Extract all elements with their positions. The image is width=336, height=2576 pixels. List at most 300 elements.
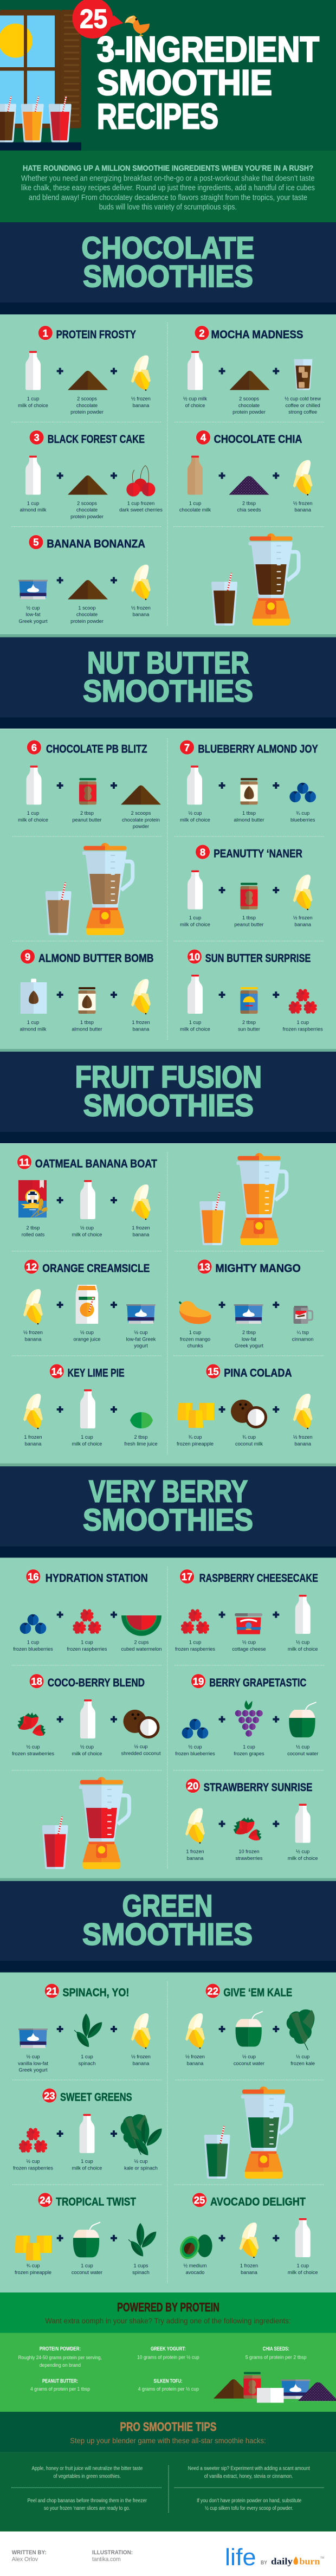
plus <box>219 2235 225 2242</box>
recipe 18: Coco-Berry Blend <box>12 1674 161 1756</box>
plus <box>111 1302 117 1308</box>
ingredient: watermelon: 2 cups <box>134 1640 149 1645</box>
ingredient: milk: milk of choice <box>288 2270 318 2275</box>
ingredient: banana: 1 frozen <box>24 1434 42 1440</box>
number badge 14 <box>49 1364 64 1379</box>
ingredient: milk: milk of choice <box>72 2165 102 2171</box>
ingredient: milk: ½ cup <box>296 1640 309 1645</box>
recipe 21: Spinach, Yo! <box>18 1983 151 2073</box>
ingredient: blueberries: frozen blueberries <box>175 1751 215 1756</box>
ingredient: cherries: 1 cup frozen <box>127 500 154 506</box>
ingredient: peanut butter <box>234 883 264 927</box>
ingredient: raspberries: 1 cup <box>81 1640 93 1645</box>
ingredient: almond butter <box>234 778 264 822</box>
ingredient: milk <box>72 1699 102 1756</box>
ingredient: milk <box>72 1180 102 1237</box>
ingredient: protein powder <box>68 580 108 624</box>
ingredient: protein powder: 2 scoops <box>77 396 97 401</box>
number badge 19 <box>191 1674 205 1689</box>
tip 1 <box>31 2465 143 2480</box>
ingredient: coconut milk: coconut milk <box>235 1441 263 1446</box>
illustration: fruit blender and glass <box>199 1153 287 1245</box>
ingredient: pineapple <box>15 2236 51 2275</box>
number badge 16: 16 <box>28 1571 39 1582</box>
protein item: greek yogurt <box>137 2346 199 2360</box>
ingredient: coconut water: coconut water <box>72 2270 102 2275</box>
ingredient: banana: ½ frozen <box>23 1330 43 1335</box>
plus <box>273 991 279 998</box>
number badge 24 <box>38 2193 53 2207</box>
plus <box>273 2235 279 2242</box>
recipe 9: Almond Butter Bomb <box>20 949 154 1032</box>
ingredient: banana: banana <box>25 1441 42 1446</box>
protein item: powder: depending on brand <box>40 2362 81 2368</box>
ingredient: blueberries: ¾ cup <box>296 810 309 816</box>
ingredient: yogurt: low-fat <box>242 1336 256 1342</box>
ingredient: raspberries: ½ cup <box>26 2159 40 2164</box>
ingredient: milk: ½ cup <box>296 1849 309 1854</box>
ingredient: coconut water: ½ cup <box>242 2054 256 2059</box>
ingredient: milk <box>180 871 210 927</box>
section strip and header: Nut Butter Smoothies: NUT BUTTER <box>87 646 249 680</box>
window sill <box>0 142 81 151</box>
ingredient: banana: ½ frozen <box>131 605 151 610</box>
logo: life by daily burn: burn <box>299 2556 320 2567</box>
ingredient: banana: banana <box>187 1856 204 1861</box>
ingredient: yogurt <box>18 580 48 624</box>
protein item: chia seeds <box>245 2346 306 2360</box>
ingredient: shredded coconut: shredded coconut <box>121 1750 161 1756</box>
ingredient: banana: 1 frozen <box>240 2263 258 2269</box>
ingredient: cold brew coffee: coffee or chilled <box>286 403 320 408</box>
ingredient: cherries <box>119 466 163 513</box>
ingredient: milk: milk of choice <box>180 817 210 822</box>
ingredient: kale or spinach <box>121 2114 165 2171</box>
ingredient: avocado <box>176 2233 212 2275</box>
ingredient: rolled oats: rolled oats <box>22 1232 45 1237</box>
ingredient: peanut butter: 2 tbsp <box>80 810 94 816</box>
logo: life by daily burn: daily <box>271 2556 293 2567</box>
ingredient: rolled oats: 2 tbsp <box>26 1225 40 1231</box>
ingredient: milk: milk of choice <box>180 922 210 927</box>
icon: toucan bird <box>125 15 150 36</box>
header panel <box>0 0 336 151</box>
section strip and header: Very Berry Smoothies <box>0 1464 336 1558</box>
heading: SUN BUTTER SURPRISE <box>205 952 311 965</box>
ingredient: protein powder <box>230 371 270 415</box>
recipe 15: Pina Colada <box>177 1364 313 1446</box>
ingredient: mango: frozen mango <box>180 1336 210 1342</box>
ingredient: protein powder: protein powder <box>70 619 104 624</box>
number badge 3: 3 <box>34 432 40 443</box>
ingredient: almond milk: 1 cup <box>27 1020 39 1025</box>
section strip and header: Green Smoothies: SMOOTHIES <box>82 1917 253 1952</box>
ingredient: banana: banana <box>133 403 150 408</box>
ingredient: protein powder: 2 scoops <box>239 396 259 401</box>
ingredient: pineapple: ¾ cup <box>188 1434 202 1440</box>
recipe 17: Raspberry Cheesecake <box>175 1569 318 1652</box>
plus <box>219 887 225 893</box>
ingredient: milk: milk of choice <box>18 817 48 822</box>
section strip and header: Green Smoothies <box>0 1878 336 1972</box>
plus <box>57 1197 63 1203</box>
heading: OATMEAL BANANA BOAT <box>35 1158 157 1170</box>
credit: writer: Alex Orlov <box>12 2556 38 2563</box>
ingredient: yogurt: ½ cup <box>26 2054 40 2059</box>
ingredient: cinnamon <box>292 1306 314 1342</box>
ingredient: banana: banana <box>133 1026 150 1032</box>
heading: POWERED BY PROTEIN <box>117 2300 219 2314</box>
ingredient: raspberries <box>283 989 323 1032</box>
ingredient: banana <box>131 1184 151 1237</box>
protein item: silken tofu: 4 grams of protein per ½ cup <box>138 2386 199 2392</box>
number badge 17 <box>180 1569 194 1584</box>
plus <box>273 1716 279 1723</box>
ingredient: milk: of choice <box>185 403 205 408</box>
ingredient: avocado: avocado <box>186 2270 204 2275</box>
ingredient: raspberries: frozen raspberries <box>67 1646 107 1652</box>
number badge 13 <box>197 1259 212 1274</box>
plus <box>219 1612 225 1618</box>
number badge 7: 7 <box>184 742 190 753</box>
ingredient: milk: 1 cup <box>81 1434 93 1440</box>
ingredient: cinnamon: ¼ tsp <box>296 1330 309 1335</box>
illustration: chocolate blender and glass <box>211 533 299 626</box>
plus <box>219 2026 225 2032</box>
ingredient: strawberries: frozen strawberries <box>12 1751 54 1756</box>
ingredient: almond butter: 1 tbsp <box>80 1020 94 1025</box>
panel: pro smoothie tips <box>0 2412 336 2531</box>
section strip and header: Green Smoothies: GREEN <box>122 1889 212 1923</box>
ingredient: protein powder: 2 scoops <box>77 500 97 506</box>
ingredient: protein powder: chocolate <box>76 507 98 513</box>
ingredient: lime <box>124 1412 158 1446</box>
ingredient: banana: banana <box>133 1232 150 1237</box>
heading: TROPICAL TWIST <box>56 2195 136 2208</box>
ingredient: milk <box>180 975 210 1032</box>
number badge 5: 5 <box>33 537 39 548</box>
ingredient: cherries: dark sweet cherries <box>119 507 163 513</box>
protein item: peanut butter: 4 grams of protein per 1 tbsp <box>30 2386 90 2392</box>
number badge 2 <box>195 326 209 340</box>
ingredient: watermelon: cubed watermelon <box>121 1646 162 1652</box>
illustration: berry blender and glass <box>42 1777 129 1869</box>
plus <box>111 782 117 789</box>
ingredient: protein powder: powder <box>133 824 149 829</box>
credit: writer: WRITTEN BY: <box>12 2549 47 2556</box>
recipe 11: Oatmeal Banana Boat <box>17 1155 157 1237</box>
plus <box>273 782 279 789</box>
ingredient: almond butter: 1 tbsp <box>242 810 256 816</box>
ingredient: chia seeds: chia seeds <box>237 507 261 513</box>
ingredient: coconut water <box>287 1702 318 1756</box>
heading: PINA COLADA <box>224 1367 292 1380</box>
ingredient: almond milk: almond milk <box>20 1026 47 1032</box>
ingredient: pineapple: frozen pineapple <box>177 1441 214 1446</box>
ingredient: raspberries <box>13 2128 53 2171</box>
divider lines: chocolate <box>11 323 324 626</box>
tip 1: of vegetables in green smoothies. <box>53 2474 121 2480</box>
ingredient: banana: ½ frozen <box>131 396 151 401</box>
ingredient: milk <box>18 765 48 822</box>
logo: life by daily burn <box>225 2544 324 2571</box>
plus <box>111 1197 117 1203</box>
plus <box>273 1820 279 1827</box>
plus <box>57 368 63 374</box>
illustration: green blender and glass <box>204 2086 291 2179</box>
heading: BLACK FOREST CAKE <box>48 433 145 446</box>
ingredient: grapes: frozen grapes <box>234 1751 264 1756</box>
ingredient: cinnamon: cinnamon <box>292 1336 314 1342</box>
ingredient: milk: 1 cup <box>189 1020 201 1025</box>
number badge 15: 15 <box>208 1366 219 1377</box>
number badge 13: 13 <box>199 1261 210 1272</box>
ingredient: banana: banana <box>294 922 312 927</box>
number badge 6: 6 <box>31 742 37 753</box>
ingredient: chia seeds <box>223 476 272 513</box>
number badge 16 <box>26 1569 41 1584</box>
ingredient: banana <box>293 875 313 927</box>
ingredient: coconut milk: ¾ cup <box>242 1434 256 1440</box>
recipe 2: Mocha Madness <box>183 326 321 415</box>
tip 2: of vanilla extract, honey, stevia or cinnamon. <box>204 2474 293 2480</box>
plus <box>57 2026 63 2032</box>
credit: illustrator: ILLUSTRATION: <box>92 2549 133 2556</box>
ingredient: rolled oats <box>18 1180 48 1237</box>
ingredient: milk <box>180 765 210 822</box>
divider lines: fruit fusion <box>12 1152 324 1455</box>
tip 3 <box>28 2498 147 2511</box>
recipe 4: Chocolate Chia <box>179 430 313 513</box>
ingredient: banana: banana <box>133 2060 150 2066</box>
ingredient: almond butter <box>72 987 102 1032</box>
logo: life by daily burn: life <box>225 2544 256 2571</box>
title: RECIPES <box>97 96 218 136</box>
ingredient: cold brew coffee: ½ cup cold brew <box>285 396 321 401</box>
plus <box>273 472 279 479</box>
ingredient: banana <box>185 2013 205 2066</box>
ingredient: milk: milk of choice <box>72 1232 102 1237</box>
ingredient: sun butter: 2 tbsp <box>242 1020 256 1025</box>
ingredient: milk: milk of choice <box>18 403 48 408</box>
ingredient: banana: ½ frozen <box>185 2054 205 2059</box>
number badge 20: 20 <box>188 1780 198 1792</box>
recipe 1: Protein Frosty <box>18 326 151 415</box>
ingredient: milk: milk of choice <box>180 1026 210 1032</box>
ingredient: spinach <box>128 2223 159 2275</box>
ingredient: cottage cheese: ½ cup <box>242 1640 256 1645</box>
ingredient: milk <box>72 2114 102 2171</box>
heading: CHOCOLATE PB BLITZ <box>46 743 147 756</box>
section strip and header: Very Berry Smoothies: VERY BERRY <box>89 1474 248 1509</box>
ingredient: milk: milk of choice <box>72 1441 102 1446</box>
plus <box>111 1612 117 1618</box>
illustration: nut butter blender and glass <box>46 843 133 935</box>
ingredient: milk <box>183 351 207 408</box>
ingredient: yogurt: low-fat Greek <box>126 1336 156 1342</box>
ingredient: kale: frozen kale <box>290 2060 315 2066</box>
ingredient: banana: banana <box>133 612 150 617</box>
ingredient: coconut milk <box>231 1400 267 1446</box>
ingredient: protein powder <box>68 475 108 519</box>
number badge 24: 24 <box>40 2194 51 2206</box>
protein item: greek yogurt: 10 grams of protein per ½ cup <box>137 2354 199 2360</box>
ingredient: banana: 1 frozen <box>132 1020 150 1025</box>
ingredient: lime: fresh lime juice <box>124 1441 158 1446</box>
plus <box>57 2235 63 2242</box>
ingredient: peanut butter: 1 tbsp <box>242 915 256 920</box>
ingredient: shredded coconut <box>121 1710 161 1756</box>
protein item: powder: Roughly 24-50 grams protein per serving, <box>18 2355 102 2361</box>
section strip and header: Fruit Fusion Smoothies: SMOOTHIES <box>83 1089 254 1123</box>
ingredient: banana: ½ frozen <box>293 915 313 920</box>
ingredient: coconut water: 1 cup <box>81 2263 93 2269</box>
plus <box>57 1406 63 1413</box>
credit: illustrator: tantika.com <box>92 2556 121 2563</box>
plus <box>273 1612 279 1618</box>
number badge 21: 21 <box>46 1985 57 1997</box>
tip 1: Apple, honey or fruit juice will neutralize the bitter taste <box>31 2465 143 2471</box>
ingredient: coconut water: ½ cup <box>296 1744 309 1750</box>
ingredient: milk: 1 cup <box>27 810 39 816</box>
ingredient: strawberries: ½ cup <box>26 1744 40 1750</box>
ingredient: banana: ½ frozen <box>131 2054 151 2059</box>
credit: writer <box>12 2549 47 2563</box>
ingredient: banana: banana <box>25 1336 42 1342</box>
subheading: Step up your blender game with these all-star smoothie hacks: <box>70 2436 266 2445</box>
heading: PRO SMOOTHIE TIPS <box>120 2420 216 2434</box>
plus <box>219 991 225 998</box>
ingredient: kale <box>287 2010 315 2066</box>
number badge 4: 4 <box>201 432 206 443</box>
logo: life by daily burn: BY <box>261 2560 267 2566</box>
ingredient: raspberries: 1 cup <box>189 1640 201 1645</box>
heading: ALMOND BUTTER BOMB <box>38 952 154 965</box>
icon group: protein ingredients <box>214 2372 336 2403</box>
number badge 8: 8 <box>200 846 205 858</box>
number badge 14: 14 <box>51 1366 63 1377</box>
plus <box>219 1716 225 1723</box>
ingredient: protein powder: 2 scoops <box>131 810 151 816</box>
ingredient: blueberries <box>13 1614 53 1652</box>
ingredient: avocado: ½ medium <box>184 2263 207 2269</box>
section strip and header: Fruit Fusion Smoothies: FRUIT FUSION <box>75 1060 262 1094</box>
recipe 13: Mighty Mango <box>179 1259 314 1349</box>
number badge 18: 18 <box>31 1676 42 1687</box>
plus <box>219 1302 225 1308</box>
ingredient: yogurt: Greek yogurt <box>18 2068 48 2073</box>
ingredient: raspberries <box>67 1609 107 1652</box>
ingredient: milk <box>72 1389 102 1446</box>
title <box>97 29 319 136</box>
ingredient: protein powder: chocolate <box>76 612 98 617</box>
ingredient: blueberries: ½ cup <box>188 1744 202 1750</box>
ingredient: banana: banana <box>187 2060 204 2066</box>
plus <box>273 2026 279 2032</box>
ingredient: peanut butter: peanut butter <box>234 922 264 927</box>
protein item: powder: PROTEIN POWDER: <box>40 2346 81 2352</box>
ingredient: yogurt: yogurt <box>134 1343 148 1349</box>
number badge 1: 1 <box>43 327 48 339</box>
ingredient: spinach: 1 cup <box>81 2054 93 2059</box>
ingredient: strawberries: 10 frozen <box>238 1849 260 1854</box>
ingredient: yogurt: 2 tbsp <box>242 1330 256 1335</box>
ingredient: grapes <box>234 1701 264 1756</box>
plus <box>57 577 63 583</box>
heading: GIVE ‘EM KALE <box>223 1987 292 1999</box>
ingredient: cold brew coffee <box>285 359 321 415</box>
tip 3: Peel and chop bananas before throwing them in the freezer <box>28 2498 147 2504</box>
ingredient: sun butter <box>238 987 260 1032</box>
plus <box>273 368 279 374</box>
ingredient: banana <box>293 460 313 513</box>
protein item: chia seeds: 5 grams of protein per 2 tbsp <box>245 2354 306 2360</box>
number badge 23 <box>42 2088 57 2103</box>
ingredient: peanut butter <box>72 778 102 822</box>
subheading: Want extra oomph in your shake? Try adding one of the following ingredients: <box>45 2316 291 2325</box>
logo: life by daily burn: TM <box>320 2556 324 2560</box>
ingredient: blueberries: blueberries <box>290 817 315 822</box>
ingredient: kale or spinach: kale or spinach <box>124 2165 158 2171</box>
ingredient: chocolate milk: 1 cup <box>189 500 201 506</box>
number badge 9: 9 <box>25 951 30 962</box>
ingredient: sun butter: sun butter <box>238 1026 260 1032</box>
panel: powered by protein <box>0 2292 336 2412</box>
heading: STRAWBERRY SUNRISE <box>204 1781 312 1794</box>
section header: Chocolate Smoothies <box>0 222 336 314</box>
recipe 12: Orange Creamsicle <box>23 1259 156 1349</box>
ingredient: almond milk: almond milk <box>20 507 47 513</box>
protein item: silken tofu <box>138 2378 199 2392</box>
recipe 3: Black Forest Cake <box>20 430 163 519</box>
heading: COCO-BERRY BLEND <box>48 1677 145 1689</box>
section strip and header: Nut Butter Smoothies <box>0 634 336 729</box>
ingredient: coconut water <box>234 2011 264 2066</box>
number badge 9 <box>21 949 35 964</box>
number badge 25: 25 <box>194 2194 205 2206</box>
heading: PROTEIN FROSTY <box>56 329 136 341</box>
ingredient: protein powder <box>121 785 161 829</box>
plus <box>111 991 117 998</box>
plus <box>111 368 117 374</box>
ingredient: yogurt: ½ cup <box>134 1330 148 1335</box>
ingredient: banana: 1 frozen <box>186 1849 204 1854</box>
ingredient: blueberries: 1 cup <box>27 1640 39 1645</box>
ingredient: milk: milk of choice <box>288 1646 318 1652</box>
ingredient: pineapple <box>177 1403 214 1446</box>
badge: 25 speech bubble <box>73 0 123 38</box>
plus <box>57 1612 63 1618</box>
number badge 23: 23 <box>44 2090 55 2101</box>
ingredient: milk: 1 cup <box>27 396 39 401</box>
ingredient: almond milk <box>20 979 47 1032</box>
ingredient: orange juice: orange juice <box>73 1336 101 1342</box>
section strip and header: Nut Butter Smoothies: SMOOTHIES <box>83 674 253 709</box>
ingredient: banana: banana <box>294 507 312 513</box>
ingredient: banana: ½ frozen <box>293 1434 313 1440</box>
protein item: greek yogurt: GREEK YOGURT: <box>151 2346 186 2352</box>
number badge 4 <box>196 430 210 445</box>
recipe 19: Berry Grapetastic <box>175 1674 318 1756</box>
ingredient: milk <box>288 1595 318 1652</box>
heading: SWEET GREENS <box>60 2091 132 2104</box>
number badge 1 <box>38 326 53 340</box>
ingredient: blueberries <box>175 1719 215 1756</box>
recipe 10: Sun Butter Surprise <box>180 949 323 1032</box>
plus <box>273 887 279 893</box>
section header: Chocolate Smoothies: CHOCOLATE <box>81 231 255 266</box>
protein item: peanut butter <box>30 2378 90 2392</box>
